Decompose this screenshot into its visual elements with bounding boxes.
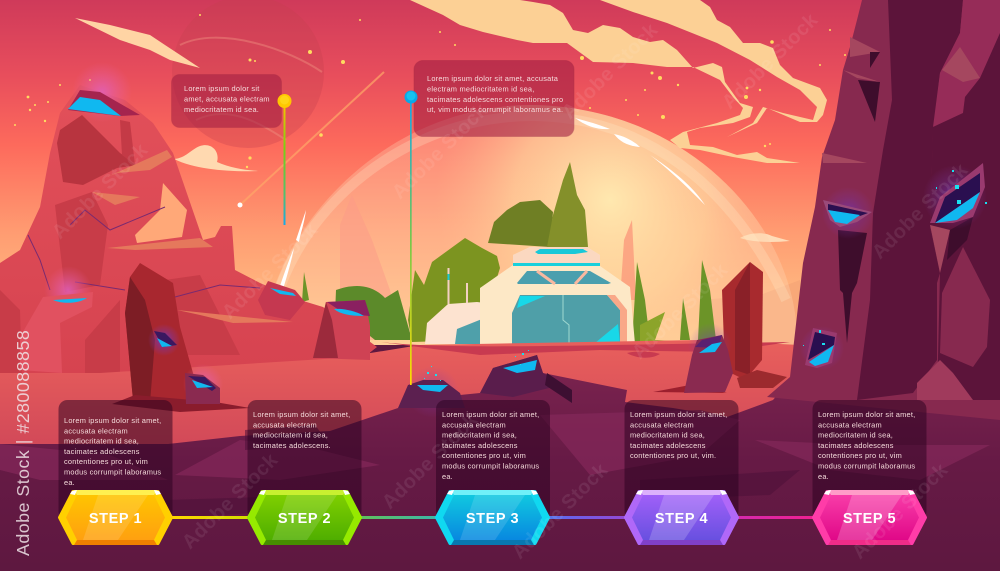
panel: step 4 text: mediocritatem id sea, [630,430,705,440]
panel: step 3 text [436,400,550,520]
cloud: top right band [600,0,827,137]
stock id vertical text: Adobe Stock | #280088858 [13,330,33,556]
panel: step 2 text: mediocritatem id sea, [253,430,328,440]
watermarks: Adobe Stock [628,259,733,364]
watermarks: Adobe Stock [48,139,153,244]
foreground facets [0,410,990,520]
panel: step 5 text: tacimates adolescens [818,441,894,450]
right rocks [653,262,787,393]
callout: top left: mediocritatem id sea. [184,105,259,114]
button: step 3 [436,490,548,545]
panel: step 5 text: Lorem ipsum dolor sit amet, [818,410,915,419]
ground plain [0,340,800,460]
top-left crater crystal [68,62,140,122]
button: step 1 [60,490,172,545]
callout: top center: Lorem ipsum dolor sit amet, accusata [427,74,559,83]
dome [264,105,797,345]
panel: step 5 text: contentiones pro ut, vim [818,451,902,460]
timeline connector [170,516,815,519]
watermarks: Adobe Stock [868,159,973,264]
button: step 2: STEP 2 [278,511,331,527]
panel: step 5 text: accusata electram [818,420,882,430]
distant mesas [0,250,800,345]
callout: top left [172,74,282,128]
right cliff [767,0,1000,420]
panel: step 1 text: accusata electram [64,426,128,436]
crystal: cliff left [822,187,874,239]
callout: top center: electram mediocritatem id sea, [427,84,535,94]
callout: top left: Lorem ipsum dolor sit [184,84,259,93]
watermarks: Adobe Stock [508,459,613,564]
panel: step 3 text: contentiones pro ut, vim [442,451,526,460]
panel: step 2 text: Lorem ipsum dolor sit amet, [253,410,350,419]
panel: step 1 text: tacimates adolescens [64,447,140,456]
cloud: big top center [410,0,800,163]
panel: step 5 text: mediocritatem id sea, [818,430,893,440]
watermarks: Adobe Stock [848,459,953,564]
crystal: left pillar [148,324,180,356]
callout: top center: tacimates adolescens contentiones pro [427,95,563,104]
crystal: cliff lower [800,326,844,370]
crystal: mid rock 2 [313,300,370,360]
panel: step 1 text: modus corrumpit laboramus [64,468,161,476]
button: step 1: STEP 1 [89,511,142,527]
callout: top center: ut, vim modus corrumpit laboramus ea. [427,105,563,114]
pin: yellow marker [278,94,292,225]
callout: top left: amet, accusata electram [184,94,270,104]
panel: step 5 text [812,400,926,520]
crystal: cliff right [923,163,987,229]
left rock massif [0,85,377,376]
panel: step 3 text: mediocritatem id sea, [442,430,517,440]
watermarks: Adobe Stock [378,409,483,514]
button: step 4 [626,490,738,545]
button: step 3: STEP 3 [466,511,519,527]
meteor [238,72,384,208]
panel: step 1 text: contentiones pro ut, vim [64,457,148,466]
panel: step 4 text: tacimates adolescens [630,441,706,450]
watermarks: Adobe Stock [558,19,663,124]
callout: top center [414,60,574,136]
ground shadow strip [380,342,790,358]
panel: step 2 text: accusata electram [253,420,317,430]
cloud: upper left [75,18,200,68]
panel: step 1 text: mediocritatem id sea, [64,436,139,446]
ground dark foreground [0,355,1000,571]
green plants [302,162,716,344]
panel: step 4 text: contentiones pro ut, vim. [630,451,716,460]
panel: step 2 text: tacimates adolescens. [253,441,331,450]
panel: step 3 text: Lorem ipsum dolor sit amet, [442,410,539,419]
panel: step 4 text: accusata electram [630,420,694,430]
button: step 2 [248,490,360,545]
cloud: horizon right [740,233,790,242]
panel: step 3 text: accusata electram [442,420,506,430]
crystal: mid rock 1 [258,281,305,320]
crystal: crater 4 [480,350,572,403]
panel: step 4 text [624,400,738,520]
panel: step 2 text [248,400,362,520]
crystal: right ground [684,323,733,393]
cloud: small left [174,145,258,171]
panel: step 4 text: Lorem ipsum dolor sit amet, [630,410,727,419]
pin: blue marker [404,90,418,385]
panel: step 5 text: modus corrumpit laboramus [818,462,915,470]
button: step 5 [814,490,926,545]
watermarks: Adobe Stock [218,219,323,324]
watermarks: Adobe Stock [718,9,823,114]
crystal: left ground [183,364,223,404]
base building [425,247,635,344]
panel: step 5 text: ea. [818,472,829,481]
panel: step 1 text: ea. [64,478,75,487]
panel: step 3 text: modus corrumpit laboramus [442,462,539,470]
panel: step 3 text: tacimates adolescens [442,441,518,450]
watermarks: Adobe Stock [178,449,283,554]
rock: left pillar [112,263,250,412]
sky background [0,0,1000,345]
crystal: left rock [20,266,93,373]
crystal: crater 3 [398,366,465,418]
yellow star specks [14,14,846,168]
button: step 4: STEP 4 [655,511,708,527]
planet [172,0,324,148]
panel: step 1 text [58,400,172,520]
panel: step 1 text: Lorem ipsum dolor sit amet, [64,416,161,425]
button: step 5: STEP 5 [843,511,896,527]
watermarks: Adobe Stock [388,99,493,204]
panel: step 3 text: ea. [442,472,453,481]
